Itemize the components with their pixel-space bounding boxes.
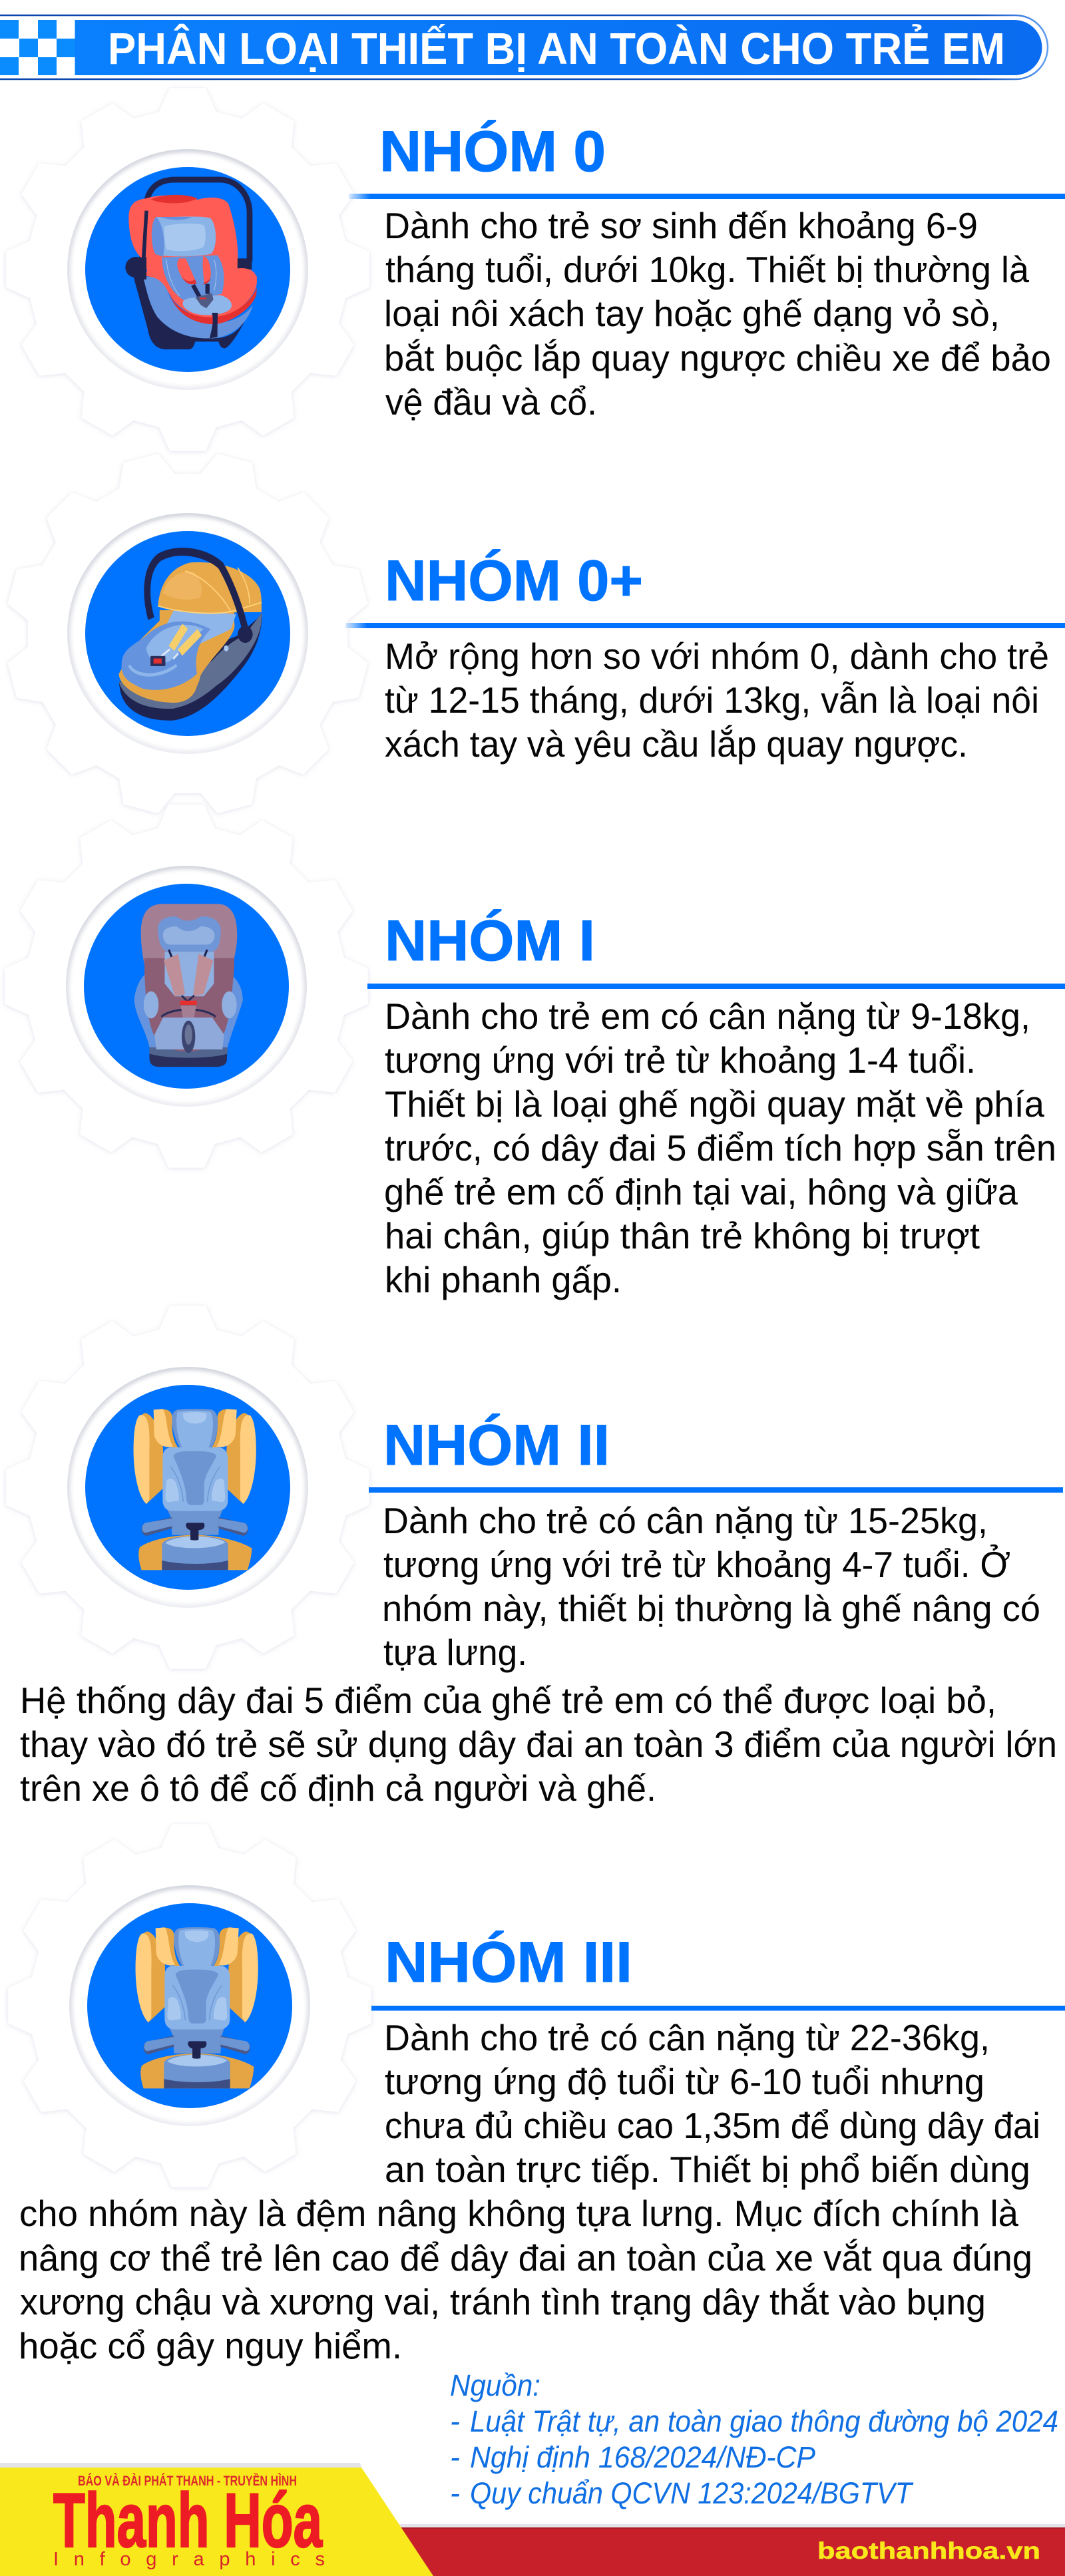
body text: Dành cho trẻ sơ sinh đến khoảng 6-9: [384, 205, 978, 246]
red band: [393, 2524, 1065, 2527]
body text: Thiết bị là loại ghế ngồi quay mặt về phía: [385, 1083, 1044, 1125]
icon: high-back booster seat: [134, 1409, 256, 1570]
divider line: [345, 623, 1065, 628]
body text: thay vào đó trẻ sẽ sử dụng dây đai an toàn 3 điểm của người lớn: [20, 1724, 1057, 1765]
header bar: [75, 20, 1042, 75]
badge ring: [69, 1885, 310, 2126]
body text: tựa lưng.: [383, 1632, 527, 1673]
badge ring: [67, 149, 308, 390]
icon: infant carrier seat: [125, 180, 258, 349]
logo: Thanh Hóa: Thanh Hóa: [53, 2478, 323, 2563]
body text: tháng tuổi, dưới 10kg. Thiết bị thường là: [385, 249, 1029, 290]
heading: NHÓM II: [383, 1413, 610, 1477]
divider line: [349, 194, 1065, 199]
body text: nhóm này, thiết bị thường là ghế nâng có: [382, 1588, 1040, 1629]
heading: NHÓM 0: [379, 120, 606, 184]
body text: Dành cho trẻ có cân nặng từ 15-25kg,: [383, 1500, 988, 1541]
body text: nâng cơ thể trẻ lên cao để dây đai an toàn của xe vắt qua đúng: [19, 2237, 1032, 2279]
sources: [450, 2368, 1058, 2510]
body text: Dành cho trẻ có cân nặng từ 22-36kg,: [384, 2017, 990, 2058]
badge ring: [66, 866, 307, 1107]
badge ring: [67, 1367, 308, 1608]
panel: nhóm III: [9, 1825, 1065, 2366]
body text: tương ứng độ tuổi từ 6-10 tuổi nhưng: [385, 2061, 984, 2102]
heading: NHÓM III: [385, 1931, 632, 1994]
gear backdrop: [6, 806, 367, 1167]
body text: [384, 996, 1056, 1300]
body text: từ 12-15 tháng, dưới 13kg, vẫn là loại nôi: [385, 679, 1039, 721]
checker pattern: [0, 20, 75, 75]
divider line: [371, 2006, 1065, 2011]
heading: NHÓM 0+: [385, 549, 643, 613]
body text: bắt buộc lắp quay ngược chiều xe để bảo: [384, 337, 1051, 379]
body text: loại nôi xách tay hoặc ghế dạng vỏ sò,: [384, 293, 1000, 334]
badge ring: [67, 513, 308, 754]
sources: -: [450, 2440, 460, 2474]
body text: ghế trẻ em cố định tại vai, hông và giữa: [384, 1171, 1018, 1212]
icon: booster seat: [136, 1927, 258, 2088]
panel: nhóm 0: [7, 89, 1065, 450]
body text: [384, 205, 1051, 423]
body text: hoặc cổ gây nguy hiểm.: [19, 2325, 402, 2366]
panel: nhóm I: [6, 806, 1065, 1300]
sources: Nguồn:: [450, 2368, 540, 2402]
heading: NHÓM I: [385, 909, 595, 973]
sources: -: [450, 2404, 460, 2438]
body text: cho nhóm này là đệm nâng không tựa lưng. Mục đích chính là: [19, 2193, 1018, 2234]
sources: Quy chuẩn QCVN 123:2024/BGTVT: [470, 2476, 914, 2510]
body text: Mở rộng hơn so với nhóm 0, dành cho trẻ: [385, 636, 1049, 677]
gear backdrop: [0, 413, 409, 854]
panel: nhóm II: [7, 1307, 1063, 1809]
sources: Nghị định 168/2024/NĐ-CP: [470, 2440, 815, 2474]
icon: forward-facing harness seat: [134, 904, 243, 1067]
divider line: [369, 1487, 1063, 1493]
title: PHÂN LOẠI THIẾT BỊ AN TOÀN CHO TRẺ EM: [108, 24, 1005, 74]
body text: chưa đủ chiều cao 1,35m để dùng dây đai: [385, 2105, 1040, 2146]
panel: nhóm 0+: [0, 413, 1065, 854]
divider line: [367, 984, 1065, 989]
body text: Dành cho trẻ em có cân nặng từ 9-18kg,: [385, 996, 1030, 1037]
body text: [20, 1500, 1057, 1809]
header banner: [0, 15, 1048, 79]
body text: xương chậu và xương vai, tránh tình trạng dây thắt vào bụng: [20, 2281, 986, 2322]
icon: infant carrier with canopy: [119, 552, 262, 721]
body text: hai chân, giúp thân trẻ không bị trượt: [385, 1215, 980, 1256]
sources: -: [450, 2476, 460, 2510]
footer: [0, 2463, 1065, 2576]
body text: vệ đầu và cổ.: [385, 381, 597, 423]
gear backdrop: [9, 1825, 370, 2186]
gear backdrop: [7, 1307, 368, 1668]
website: baothanhhoa.vn: [817, 2538, 1040, 2564]
body text: tương ứng với trẻ từ khoảng 1-4 tuổi.: [385, 1039, 976, 1081]
logo: Infographics: Infographics: [53, 2549, 325, 2570]
body text: [19, 2017, 1040, 2366]
header outline: [0, 15, 1048, 79]
yellow logo panel: [0, 2463, 361, 2468]
body text: Hệ thống dây đai 5 điểm của ghế trẻ em có thể được loại bỏ,: [20, 1680, 996, 1721]
body text: an toàn trực tiếp. Thiết bị phổ biến dùng: [385, 2149, 1030, 2190]
logo: org line: BÁO VÀ ĐÀI PHÁT THANH - TRUYỀN HÌNH: [78, 2474, 297, 2489]
body text: khi phanh gấp.: [385, 1259, 622, 1300]
body text: [385, 636, 1049, 765]
body text: trên xe ô tô để cố định cả người và ghế.: [20, 1767, 656, 1809]
gear backdrop: [7, 89, 368, 450]
body text: tương ứng với trẻ từ khoảng 4-7 tuổi. Ở: [383, 1544, 1010, 1585]
body text: xách tay và yêu cầu lắp quay ngược.: [385, 723, 968, 765]
body text: trước, có dây đai 5 điểm tích hợp sẵn trên: [385, 1127, 1056, 1169]
